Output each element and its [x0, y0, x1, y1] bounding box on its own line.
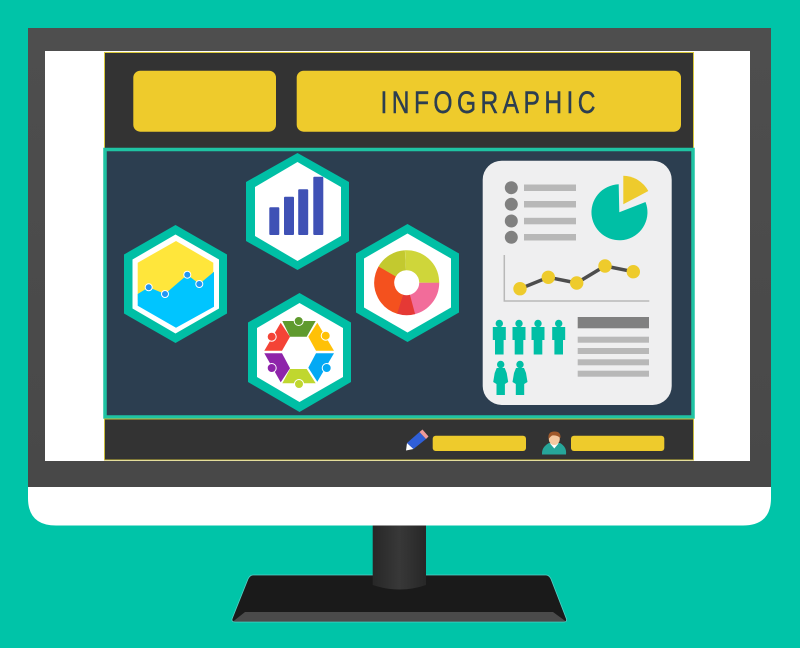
stand neck	[373, 525, 426, 590]
header yellow box	[133, 71, 276, 132]
icon: pencil	[406, 430, 428, 450]
bars	[269, 177, 323, 235]
footer yellow field 2	[571, 436, 664, 451]
bullet list	[505, 181, 576, 244]
footer yellow field 1	[433, 436, 526, 451]
yellow area	[138, 241, 213, 300]
blue area	[138, 272, 214, 328]
hexagon: bar chart	[246, 153, 349, 270]
ring segments	[264, 321, 334, 383]
data points	[145, 271, 203, 298]
hexagon: area chart	[124, 225, 227, 343]
hexagon: donut chart	[356, 224, 459, 342]
line chart	[504, 255, 649, 301]
main panel	[105, 150, 693, 417]
icon: person	[542, 432, 566, 454]
donut segments	[376, 252, 437, 313]
footer bar	[104, 419, 694, 460]
hexagon: ring of segments	[248, 293, 351, 412]
screen	[45, 51, 750, 461]
pie chart	[591, 176, 648, 240]
people pictogram	[493, 320, 565, 395]
text lines block	[578, 317, 649, 377]
monitor body	[28, 28, 771, 526]
ring connectors	[267, 316, 331, 388]
monitor stand	[232, 525, 567, 622]
title box	[297, 71, 681, 132]
stand base	[232, 575, 567, 622]
header bar	[104, 52, 694, 148]
monitor bezel	[28, 28, 771, 487]
stand base front edge	[233, 612, 566, 622]
report card	[483, 161, 672, 405]
monitor chin	[28, 480, 771, 526]
title: INFOGRAPHIC	[380, 84, 600, 120]
